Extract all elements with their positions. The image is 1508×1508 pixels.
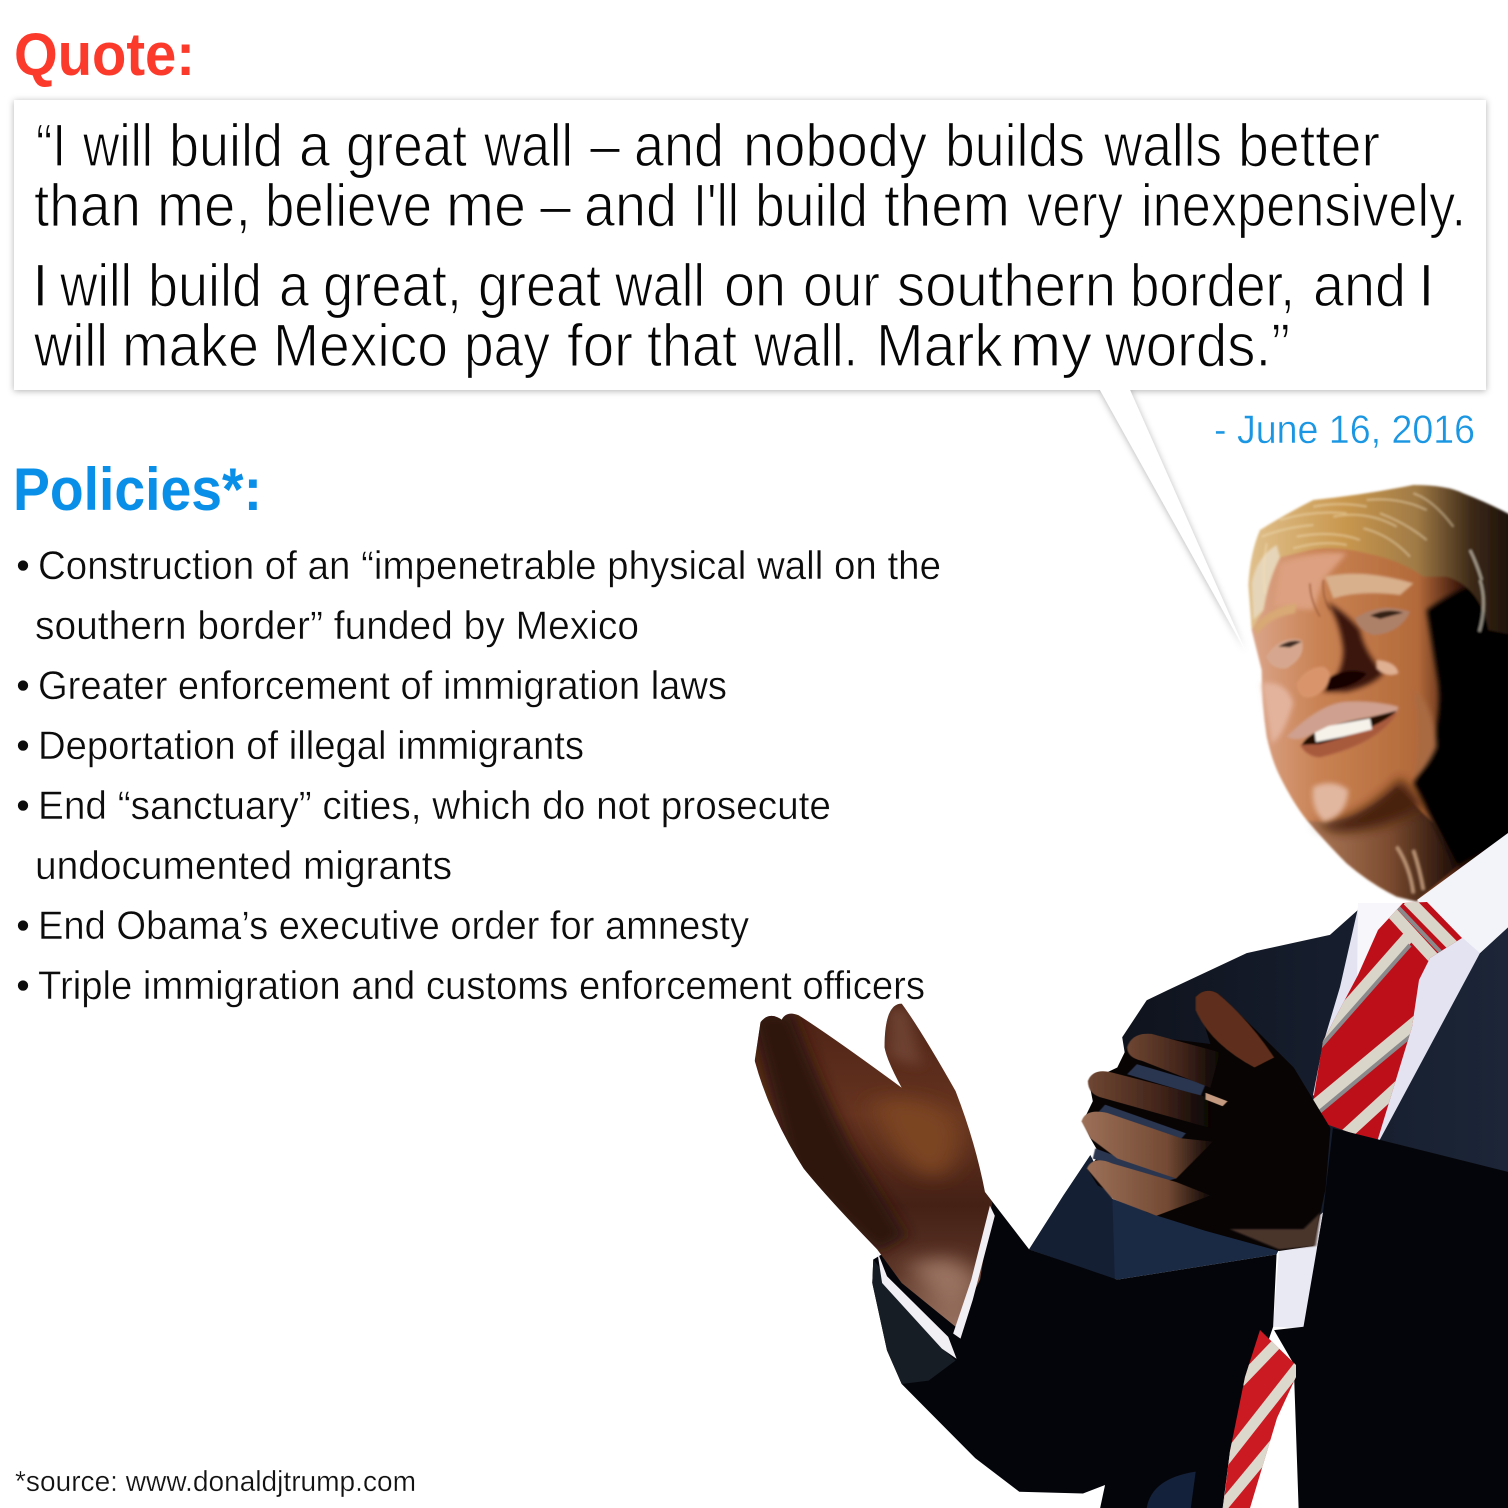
quote text: will: [33, 312, 108, 379]
quote text: great: [346, 112, 467, 179]
quote text: wall: [483, 112, 573, 179]
quote text: builds: [945, 112, 1085, 179]
quote text: Mexico: [273, 312, 448, 379]
hair: [1248, 485, 1508, 637]
policies list: •: [16, 544, 30, 588]
mouth: [1287, 701, 1398, 739]
neck: [1307, 787, 1457, 902]
quote text: Mark: [876, 312, 1004, 379]
quote text: a: [279, 252, 310, 319]
quote text: build: [148, 252, 262, 319]
quote text: build: [755, 172, 868, 239]
quote text: and: [584, 172, 677, 239]
quote text: words.”: [1104, 312, 1290, 379]
quote text: on: [724, 252, 786, 319]
portrait illustration: [740, 485, 1508, 1508]
quote text: walls: [1103, 112, 1222, 179]
heading: Policies: Policies*:: [13, 456, 262, 523]
quote text: –: [540, 172, 572, 239]
quote text: inexpensively.: [1141, 172, 1466, 239]
quote text: and: [1313, 252, 1406, 319]
policies list: Triple immigration and customs enforcement officers: [38, 964, 925, 1008]
quote text: me,: [157, 172, 251, 239]
quote text: southern: [897, 252, 1116, 319]
quote text: believe: [265, 172, 432, 239]
quote text: I'll: [693, 172, 739, 239]
quote text: will: [59, 252, 132, 319]
policies list: •: [16, 784, 30, 828]
speech bubble panel: [14, 100, 1486, 650]
left hand and cuff: [754, 1004, 995, 1359]
quote text: our: [803, 252, 880, 319]
quote text: wall: [614, 252, 705, 319]
policies list: •: [16, 664, 30, 708]
quote text: I: [32, 252, 49, 319]
lower shirt and dark suit: [872, 1128, 1508, 1508]
policies list: undocumented migrants: [35, 844, 452, 888]
heading: Quote: Quote:: [14, 21, 195, 88]
quote text: [32, 112, 1466, 379]
jacket and torso: [1029, 910, 1508, 1280]
quote text: will: [82, 112, 153, 179]
quote text: I: [1418, 252, 1435, 319]
quote text: great,: [323, 252, 462, 319]
policies list: Construction of an “impenetrable physical wall on the: [38, 544, 941, 588]
source note: *source: www.donaldjtrump.com: [15, 1466, 416, 1498]
quote text: and: [634, 112, 724, 179]
quote text: them: [884, 172, 1010, 239]
policies list: [16, 544, 941, 1008]
policies list: End “sanctuary” cities, which do not prosecute: [38, 784, 831, 828]
eyes and brows: [1266, 639, 1303, 669]
quote text: for: [567, 312, 633, 379]
policies list: Greater enforcement of immigration laws: [38, 664, 727, 708]
head: [1248, 485, 1508, 902]
quote text: me: [446, 172, 526, 239]
quote text: “I: [36, 112, 66, 179]
quote text: better: [1238, 112, 1380, 179]
policies list: southern border” funded by Mexico: [35, 604, 639, 648]
quote text: make: [122, 312, 259, 379]
policies list: •: [16, 904, 30, 948]
quote text: build: [169, 112, 283, 179]
quote text: nobody: [743, 112, 927, 179]
quote text: wall.: [753, 312, 858, 379]
quote text: very: [1027, 172, 1123, 239]
quote text: my: [1010, 312, 1092, 379]
shirt and collar: [1313, 833, 1508, 1145]
quote date: - June 16, 2016: [1214, 408, 1475, 452]
policies list: End Obama’s executive order for amnesty: [38, 904, 749, 948]
policies list: •: [16, 964, 30, 1008]
right hand: [1082, 991, 1330, 1251]
quote text: border,: [1130, 252, 1295, 319]
quote text: pay: [464, 312, 550, 379]
policies list: Deportation of illegal immigrants: [38, 724, 584, 768]
quote text: a: [299, 112, 331, 179]
quote text: –: [590, 112, 621, 179]
upper necktie: [1313, 902, 1462, 1140]
quote text: great: [478, 252, 601, 319]
policies list: •: [16, 724, 30, 768]
quote text: than: [34, 172, 141, 239]
quote text: that: [647, 312, 737, 379]
lower necktie: [1223, 1330, 1296, 1508]
